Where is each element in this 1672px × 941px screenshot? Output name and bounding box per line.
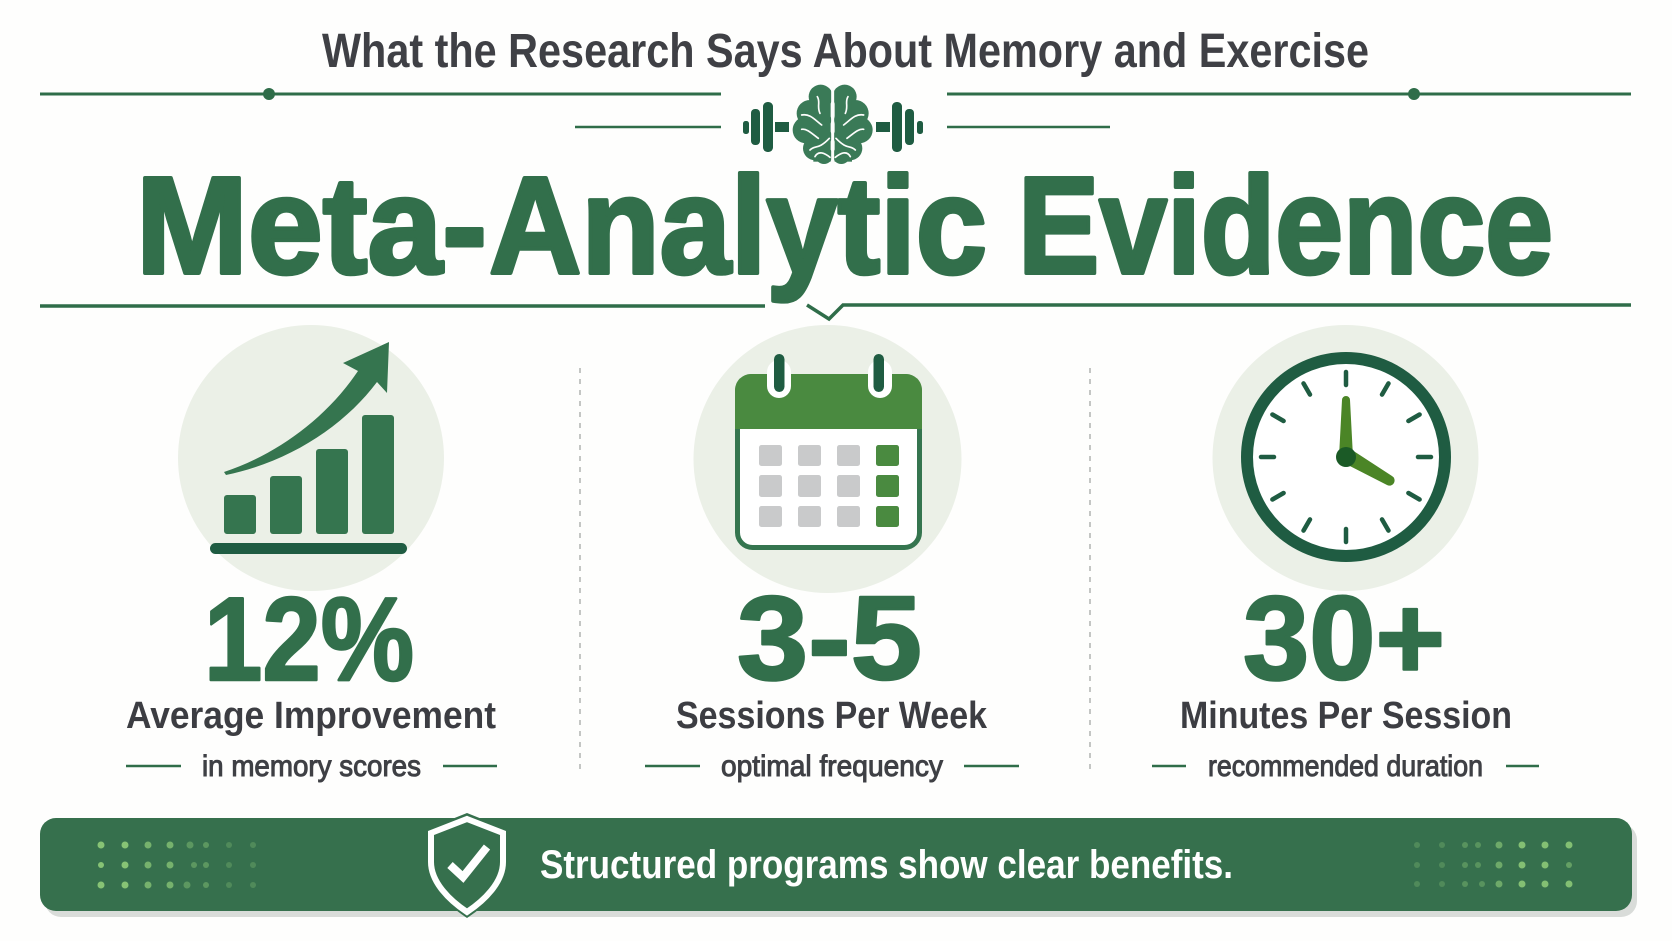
icon: clock (1212, 325, 1478, 591)
icon: brain with dumbbell (743, 82, 923, 165)
decorative dots left (98, 842, 256, 888)
sublabel: in memory scores: in memory scores (202, 750, 421, 783)
heading: Evidence (1018, 149, 1553, 303)
heading underline with notch (40, 305, 1631, 319)
header ornament lines (40, 88, 1631, 127)
decorative dots right (1414, 842, 1572, 888)
panel: sessions per week (645, 325, 1019, 783)
icon: calendar (694, 325, 962, 593)
stat: 12%: 12% (204, 573, 414, 706)
title: What the Research Says About Memory and Exercise (322, 25, 1369, 78)
stat: 3-5: 3-5 (737, 572, 922, 705)
banner text: Structured programs show clear benefits. (540, 843, 1233, 887)
label: average improvement: Average Improvement (126, 695, 496, 737)
heading: Meta- (136, 149, 487, 303)
panel: conclusion banner (40, 813, 1637, 918)
heading: Analytic (489, 149, 987, 303)
icon: rising bar chart (178, 325, 444, 591)
sublabel: recommended duration: recommended duration (1208, 750, 1483, 783)
sublabel: optimal frequency: optimal frequency (721, 750, 943, 783)
heading (136, 149, 1553, 303)
panel: minutes per session (1152, 325, 1539, 783)
stat: 30+: 30+ (1243, 572, 1445, 705)
label: minutes per session: Minutes Per Session (1180, 695, 1512, 737)
icon: shield with check (427, 813, 507, 918)
label: sessions per week: Sessions Per Week (676, 695, 988, 737)
panel: average improvement (126, 325, 497, 783)
dashed column dividers (580, 368, 1090, 772)
